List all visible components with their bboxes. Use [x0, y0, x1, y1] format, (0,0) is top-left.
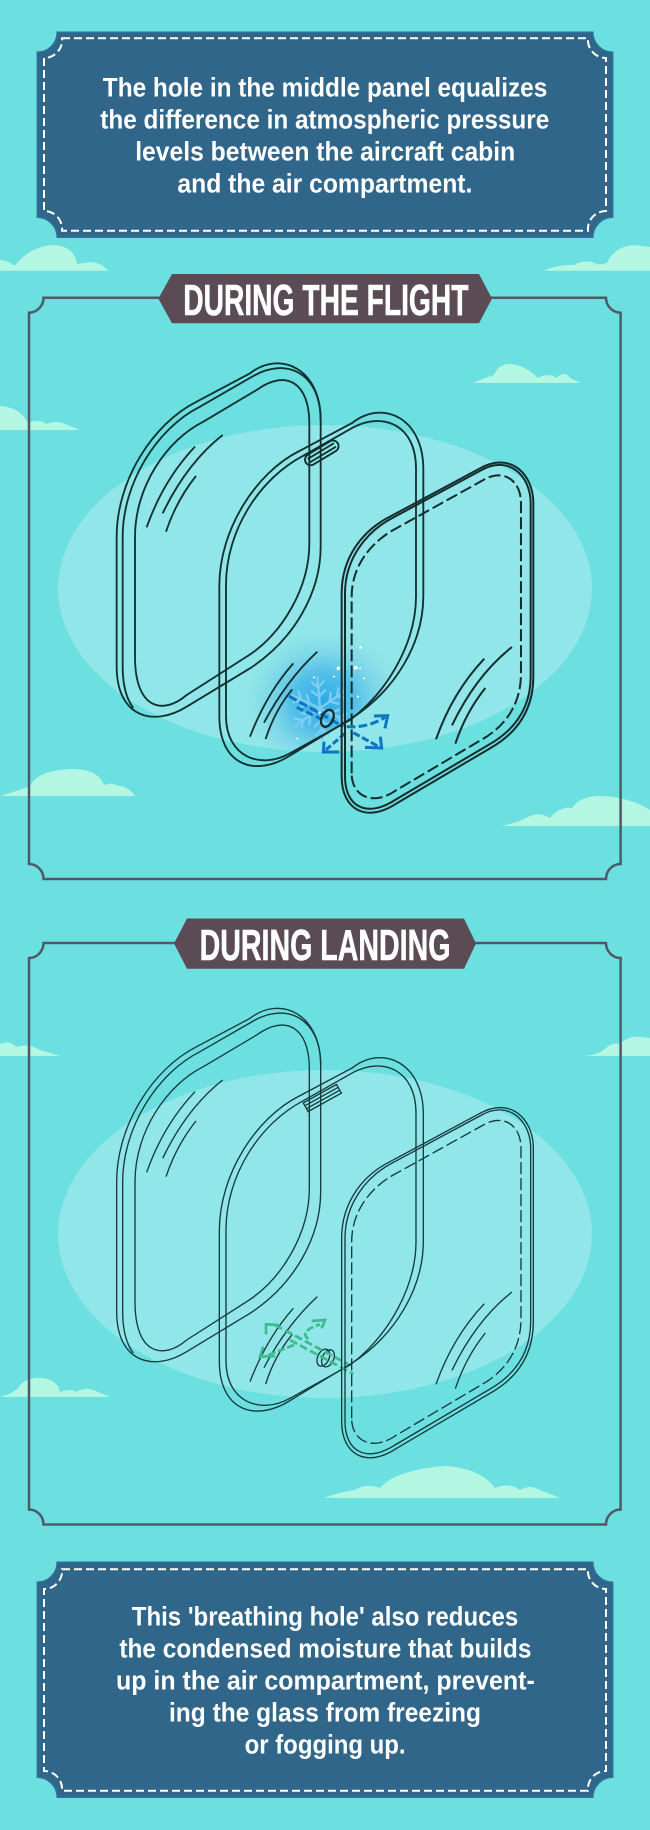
cloud: frame one lower left: [0, 769, 135, 796]
cloud: frame one upper right: [473, 364, 581, 383]
cloud: top right: [543, 245, 650, 271]
text: intro: the difference in atmospheric pressure: [100, 105, 549, 135]
text: intro: levels between the aircraft cabin: [135, 137, 515, 167]
panel: intro text: [37, 32, 613, 237]
cloud: frame one lower right: [502, 796, 650, 826]
frame: during the flight: [29, 298, 621, 879]
text: intro: and the air compartment.: [177, 169, 472, 199]
outer pane: [117, 363, 321, 717]
heading: during the flight: DURING THE FLIGHT: [183, 276, 469, 325]
text: intro: The hole in the middle panel equalizes: [103, 73, 547, 103]
inner pane: [342, 463, 533, 813]
cloud: frame two bottom: [324, 1466, 560, 1498]
diagram: window panes during flight: [117, 363, 533, 813]
text: closing: the condensed moisture that builds: [119, 1633, 531, 1663]
text: closing: up in the air compartment, prevent-: [116, 1665, 535, 1695]
heading: during landing: [174, 918, 476, 970]
cloud: top left: [0, 245, 108, 271]
backdrop ellipse: flight: [58, 425, 592, 752]
snowflake: [286, 674, 354, 743]
diagram: window panes during landing: [117, 1008, 533, 1458]
backdrop ellipse: landing: [58, 1070, 592, 1398]
middle pane: [219, 1058, 423, 1411]
cloud: frame one upper left: [0, 406, 80, 430]
outer pane: [117, 1008, 321, 1362]
frost sparkles: [296, 646, 365, 740]
text: intro: [100, 73, 549, 199]
text: closing: [116, 1601, 535, 1759]
frame: during landing: [29, 943, 621, 1524]
inner pane: [342, 1108, 533, 1458]
cloud: frame two upper right: [586, 1037, 650, 1056]
panel: closing text: [37, 1562, 613, 1797]
middle pane: [219, 413, 423, 766]
arrows: airflow in: [260, 1320, 353, 1374]
cloud: frame two upper left: [0, 1043, 60, 1056]
hole: [318, 708, 336, 729]
arrows: airflow out: [289, 696, 388, 752]
slot: [303, 438, 341, 467]
heading: during landing: DURING LANDING: [200, 921, 450, 970]
hole with plug: [314, 1347, 337, 1369]
text: closing: or fogging up.: [245, 1729, 406, 1759]
heading: during the flight: [158, 274, 492, 325]
text: closing: ing the glass from freezing: [169, 1697, 481, 1727]
text: closing: This 'breathing hole' also reduces: [132, 1601, 518, 1631]
slot: [303, 1084, 341, 1112]
cloud: frame two lower left: [0, 1378, 110, 1397]
frozen glow: [260, 644, 384, 750]
